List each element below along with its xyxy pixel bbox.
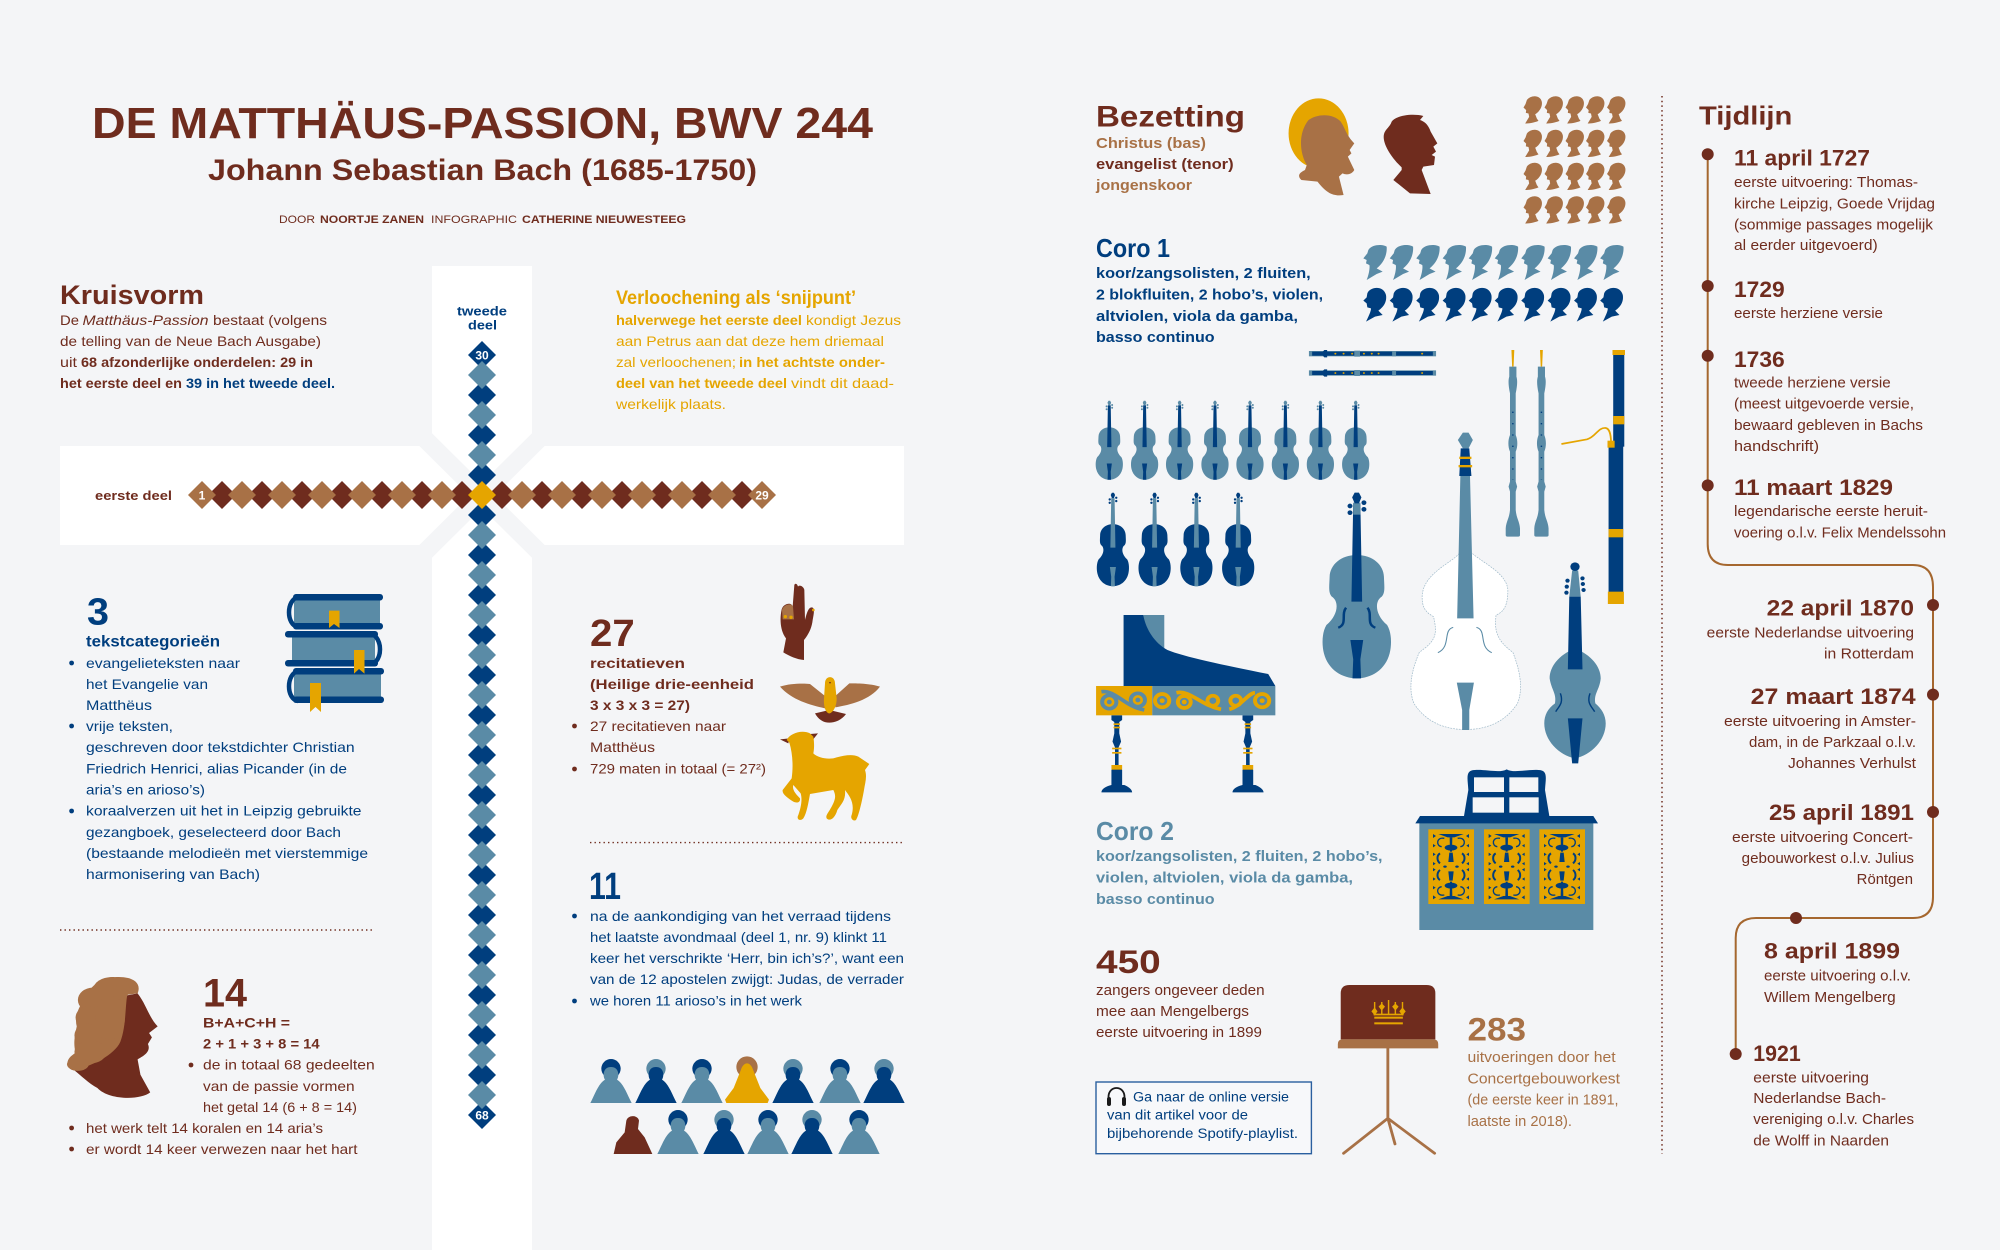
block: 283: laatste in 2018).: [1468, 1114, 1572, 1130]
icon: Christus head: [1289, 98, 1354, 195]
block: Coro 2: koor/zangsolisten, 2 fluiten, 2 hobo’s,: [1096, 848, 1382, 865]
entry: 11 april 1727: al eerder uitgevoerd): [1734, 238, 1878, 254]
block: 3 tekstcategorieën: het Evangelie van: [86, 676, 208, 692]
block: 14: er wordt 14 keer verwezen naar het hart: [86, 1141, 358, 1157]
number: 450: 450: [1096, 944, 1161, 980]
block: 27 recitatieven: recitatieven: [590, 655, 685, 671]
block: Kruisvorm: uit: [60, 354, 77, 370]
label: tweede deel: [457, 304, 507, 333]
heading: Coro 1: Coro 1: [1096, 233, 1170, 263]
entry: 8 april 1899: 8 april 1899: [1764, 939, 1900, 964]
byline: CATHERINE NIEUWESTEEG: [522, 214, 686, 226]
byline: [279, 214, 686, 226]
icon: music stand: [1338, 985, 1438, 1153]
block: Verloochening als snijpunt: aan Petrus aan dat deze hem driemaal: [616, 333, 884, 349]
block: Verloochening als snijpunt: vindt dit daad-: [791, 375, 894, 391]
block: 3 tekstcategorieën: koraalverzen uit het in Leipzig gebruikte: [86, 803, 362, 819]
entry: 11 april 1727: eerste uitvoering: Thomas-: [1734, 175, 1918, 191]
block: Coro 2: basso continuo: [1096, 891, 1215, 908]
icon: boys choir: [1524, 96, 1625, 223]
block: 450: eerste uitvoering in 1899: [1096, 1025, 1262, 1041]
block: 27 recitatieven: (Heilige drie-eenheid: [590, 676, 754, 692]
block: 3 tekstcategorieën: [69, 592, 368, 882]
block: 3 tekstcategorieën: aria’s en arioso’s): [86, 782, 205, 798]
number: 3: 3: [87, 592, 109, 634]
block: 11: na de aankondiging van het verraad tijdens: [590, 908, 891, 924]
dotted divider right: [590, 842, 904, 844]
icon: headphones: [1107, 1088, 1126, 1106]
block: Bezetting: evangelist (tenor): [1096, 156, 1234, 173]
entry: 1736: [1734, 347, 1923, 455]
block: 27 recitatieven: Matthëus: [590, 739, 655, 755]
entry: 25 april 1891: gebouworkest o.l.v. Julius: [1742, 851, 1914, 867]
timeline entries: [1707, 146, 1946, 1150]
entry: 11 april 1727: kirche Leipzig, Goede Vrijdag: [1734, 197, 1935, 213]
icon: evangelist head: [1384, 115, 1437, 194]
callout: Spotify: Ga naar de online versie: [1133, 1089, 1289, 1104]
block: 27 recitatieven: 3 x 3 x 3 = 27): [590, 697, 690, 713]
block: Coro 1: basso continuo: [1096, 329, 1215, 346]
heading: Tijdlijn: Tijdlijn: [1699, 101, 1792, 131]
block: 3 tekstcategorieën: gezangboek, geselecteerd door Bach: [86, 824, 341, 840]
block: Verloochening als snijpunt: deel van het tweede deel: [616, 375, 787, 391]
block: 11: het laatste avondmaal (deel 1, nr. 9) klinkt 11: [590, 929, 887, 945]
entry: 22 april 1870: eerste Nederlandse uitvoering: [1707, 626, 1914, 642]
entry: 11 maart 1829: legendarische eerste heruit-: [1734, 504, 1928, 520]
block: Kruisvorm: het eerste deel en: [60, 375, 182, 391]
block: Bezetting: jongenskoor: [1095, 177, 1192, 194]
block: 11: van de 12 apostelen zwijgt: Judas, de verrader: [590, 971, 904, 987]
callout: Spotify: [1096, 1082, 1311, 1154]
entry: 27 maart 1874: dam, in de Parkzaal o.l.v.: [1749, 735, 1916, 751]
block: Coro 2: [1096, 816, 1382, 908]
block: 3 tekstcategorieën: Matthëus: [86, 697, 152, 713]
label: tweede deel: tweede: [457, 304, 507, 319]
block: Verloochening als snijpunt: in het achtste onder-: [739, 354, 885, 370]
diamond numbers: 1: [199, 488, 206, 502]
block: Kruisvorm: Matthäus-Passion: [82, 312, 209, 328]
block: 283: uitvoeringen door het: [1468, 1050, 1616, 1066]
block: Coro 2: violen, altviolen, viola da gamba,: [1096, 870, 1353, 887]
block: 450: zangers ongeveer deden: [1096, 983, 1265, 999]
block: 283: Concertgebouworkest: [1468, 1072, 1620, 1088]
icon: books: [285, 594, 384, 712]
entry: 25 april 1891: eerste uitvoering Concert-: [1732, 830, 1913, 846]
block: Verloochening als snijpunt: kondigt Jezus: [806, 312, 901, 328]
icon: oboes: [1506, 350, 1549, 537]
entry: 8 april 1899: eerste uitvoering o.l.v.: [1764, 969, 1911, 985]
block: 14: van de passie vormen: [203, 1078, 355, 1094]
entry: 27 maart 1874: 27 maart 1874: [1751, 684, 1917, 709]
block: 3 tekstcategorieën: evangelieteksten naar: [86, 655, 240, 671]
entry: 1736: bewaard gebleven in Bachs: [1734, 418, 1923, 434]
icon: harpsichord: [1096, 615, 1275, 792]
entry: 1736: handschrift): [1734, 439, 1819, 455]
block: Coro 1: [1096, 233, 1323, 346]
entry: 22 april 1870: [1707, 596, 1914, 663]
icon: double bass: [1411, 433, 1521, 730]
block: 11: [572, 866, 904, 1008]
diamond numbers: 30: [475, 348, 489, 362]
dotted divider left: [60, 929, 375, 931]
block: 450: [1096, 944, 1265, 1041]
number: 27: 27: [590, 613, 635, 655]
block: Kruisvorm: de telling van de Neue Bach Ausgabe): [60, 333, 321, 349]
block: 3 tekstcategorieën: tekstcategorieën: [86, 634, 220, 651]
icon: lamb: [780, 732, 869, 820]
byline: DOOR: [279, 214, 315, 226]
icon: viola da gamba: [1544, 562, 1606, 763]
entry: 11 april 1727: [1734, 146, 1935, 254]
block: Kruisvorm: 68 afzonderlijke onderdelen: 29 in: [81, 354, 313, 370]
block: Coro 1: altviolen, viola da gamba,: [1096, 308, 1298, 325]
entry: 1736: 1736: [1734, 347, 1785, 372]
label: eerste deel: eerste deel: [95, 488, 172, 503]
icon: apostles: [590, 1056, 905, 1154]
block: Coro 1: koor/zangsolisten, 2 fluiten,: [1096, 265, 1311, 282]
block: 11: keer het verschrikte ‘Herr, bin ich’s?’, want een: [590, 950, 904, 966]
entry: 11 april 1727: (sommige passages mogelijk: [1734, 217, 1934, 233]
block: 27 recitatieven: [572, 613, 766, 776]
entry: 1921: 1921: [1753, 1041, 1801, 1066]
entry: 25 april 1891: 25 april 1891: [1769, 800, 1914, 825]
icon: dove: [780, 677, 880, 723]
icon: organ: [1415, 769, 1598, 930]
block: 450: mee aan Mengelbergs: [1096, 1004, 1249, 1020]
icon: violins row 2: [1097, 493, 1254, 586]
timeline line and dots: [1702, 148, 1939, 1060]
heading: Verloochening: Verloochening als ‘snijpunt’: [616, 288, 856, 309]
block: 14: het werk telt 14 koralen en 14 aria’s: [86, 1120, 323, 1136]
entry: 8 april 1899: [1764, 939, 1911, 1006]
diamonds: tweede deel: [468, 341, 496, 1129]
block: 3 tekstcategorieën: vrije teksten,: [86, 718, 173, 734]
entry: 22 april 1870: 22 april 1870: [1767, 596, 1914, 621]
heading: Kruisvorm: Kruisvorm: [60, 280, 204, 310]
entry: 1921: de Wolff in Naarden: [1753, 1134, 1889, 1150]
block: Kruisvorm: [60, 280, 335, 391]
entry: 25 april 1891: [1732, 800, 1914, 888]
subtitle: Johann Sebastian Bach (1685-1750): [208, 154, 757, 187]
byline: NOORTJE ZANEN: [320, 214, 424, 226]
diamond numbers: 68: [475, 1108, 489, 1122]
callout: Spotify: bijbehorende Spotify-playlist.: [1107, 1126, 1298, 1141]
block: 11: we horen 11 arioso’s in het werk: [589, 992, 803, 1008]
block: 283: [1468, 1012, 1620, 1130]
block: Verloochening als snijpunt: halverwege het eerste deel: [616, 312, 802, 328]
number: 14: 14: [203, 972, 248, 1016]
block: 14: B+A+C+H =: [203, 1014, 290, 1030]
centre diamond: [468, 481, 496, 509]
entry: 1921: [1753, 1041, 1914, 1150]
entry: 27 maart 1874: [1724, 684, 1917, 772]
byline: INFOGRAPHIC: [431, 214, 517, 226]
block: Kruisvorm: 39 in het tweede deel.: [186, 375, 335, 391]
block: 3 tekstcategorieën: harmonisering van Bach): [86, 866, 260, 882]
title: DE MATTHÄUS-PASSION, BWV 244: [92, 99, 874, 148]
icon: bassoon: [1561, 350, 1625, 604]
icon: flutes: [1309, 350, 1436, 377]
block: 3 tekstcategorieën: (bestaande melodieën met vierstemmige: [86, 845, 368, 861]
block: 27 recitatieven: 729 maten in totaal (= 27²): [590, 760, 766, 776]
entry: 1921: eerste uitvoering: [1753, 1070, 1869, 1086]
diamond numbers: [199, 348, 769, 1122]
block: Bezetting: Christus (bas): [1096, 135, 1206, 152]
entry: 1729: eerste herziene versie: [1734, 306, 1883, 322]
icon: hand: [781, 584, 815, 660]
diamonds: eerste deel: [188, 481, 776, 509]
heading: Coro 2: Coro 2: [1096, 816, 1174, 846]
entry: 1921: vereniging o.l.v. Charles: [1753, 1112, 1914, 1128]
entry: 22 april 1870: in Rotterdam: [1824, 647, 1914, 663]
block: 27 recitatieven: 27 recitatieven naar: [590, 718, 726, 734]
entry: 8 april 1899: Willem Mengelberg: [1764, 990, 1896, 1006]
entry: 1921: Nederlandse Bach-: [1753, 1091, 1886, 1107]
block: Verloochening als snijpunt: zal verloochenen;: [616, 354, 736, 370]
entry: 1736: (meest uitgevoerde versie,: [1734, 397, 1914, 413]
number: 11: 11: [589, 866, 621, 908]
block: Kruisvorm: bestaat (volgens: [213, 312, 327, 328]
block: Verloochening als snijpunt: [615, 288, 901, 412]
block: Coro 1: 2 blokfluiten, 2 hobo’s, violen,: [1096, 287, 1323, 304]
entry: 27 maart 1874: eerste uitvoering in Amster-: [1724, 714, 1916, 730]
entry: 11 maart 1829: [1734, 475, 1946, 542]
block: Kruisvorm: De: [60, 312, 79, 328]
dotted divider timeline: [1661, 96, 1663, 1154]
entry: 1729: [1734, 277, 1883, 322]
entry: 11 maart 1829: 11 maart 1829: [1734, 475, 1893, 500]
block: 3 tekstcategorieën: Friedrich Henrici, alias Picander (in de: [86, 760, 347, 776]
block: 14: 2 + 1 + 3 + 8 = 14: [203, 1036, 320, 1052]
diamond numbers: 29: [755, 488, 769, 502]
block: Bezetting: [1095, 101, 1245, 194]
block: Verloochening als snijpunt: werkelijk plaats.: [615, 396, 726, 412]
heading: Bezetting: Bezetting: [1096, 101, 1245, 134]
number: 283: 283: [1468, 1012, 1526, 1048]
block: 14: [69, 972, 375, 1157]
icon: Bach portrait: [67, 977, 158, 1098]
entry: 1729: 1729: [1734, 277, 1785, 302]
icon: choir 1 heads: [1363, 245, 1624, 322]
block: 283: (de eerste keer in 1891,: [1468, 1093, 1618, 1109]
entry: 1736: tweede herziene versie: [1734, 376, 1891, 392]
entry: 11 maart 1829: voering o.l.v. Felix Mendelssohn: [1734, 526, 1946, 542]
entry: 25 april 1891: Röntgen: [1857, 872, 1913, 888]
entry: 11 april 1727: 11 april 1727: [1734, 146, 1870, 171]
block: 14: de in totaal 68 gedeelten: [203, 1057, 375, 1073]
block: 3 tekstcategorieën: geschreven door tekstdichter Christian: [86, 739, 355, 755]
cross background: [60, 266, 904, 1250]
icon: viola: [1323, 493, 1391, 678]
entry: 27 maart 1874: Johannes Verhulst: [1788, 756, 1916, 772]
callout: Spotify: van dit artikel voor de: [1107, 1108, 1248, 1123]
label: tweede deel: deel: [468, 318, 497, 333]
icon: violins row 1: [1096, 401, 1369, 480]
block: 14: het getal 14 (6 + 8 = 14): [203, 1099, 357, 1115]
